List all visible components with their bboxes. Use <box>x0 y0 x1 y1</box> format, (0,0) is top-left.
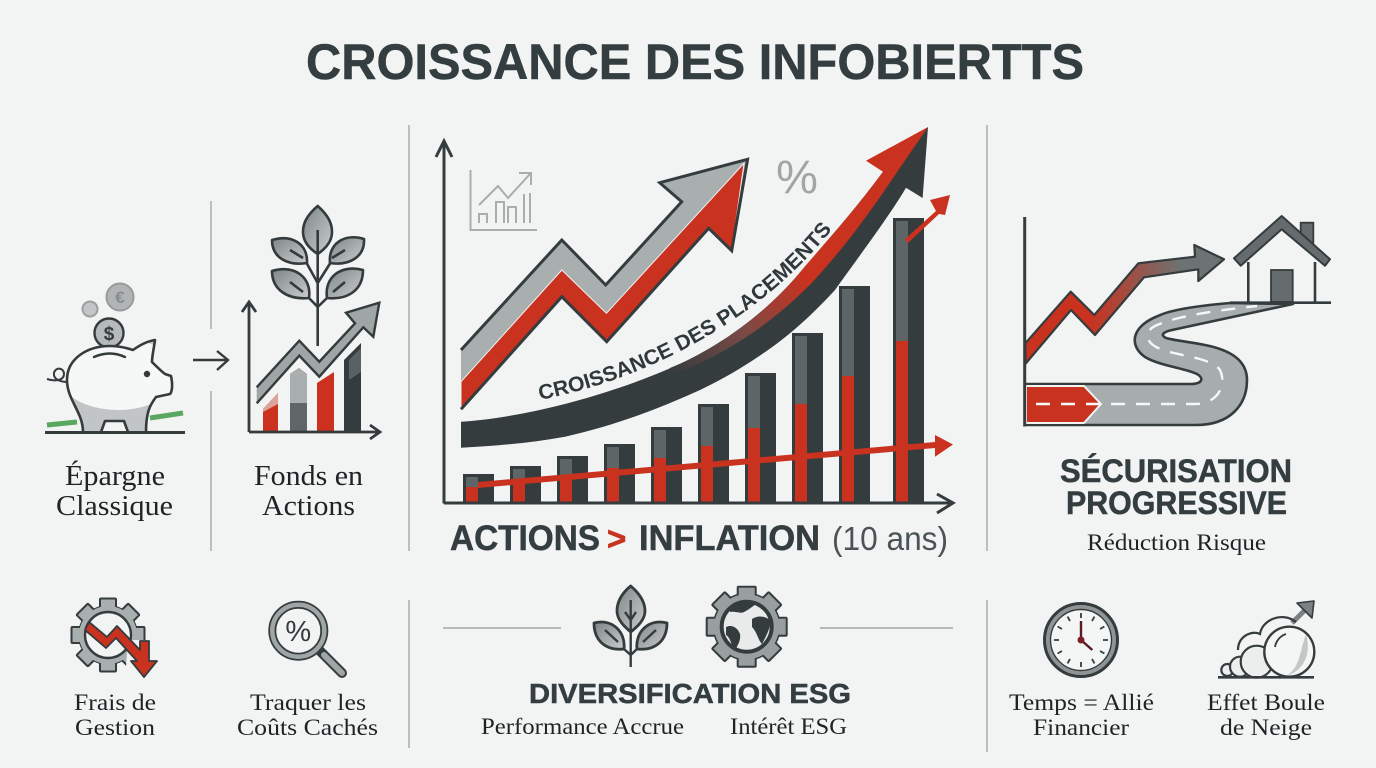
heading: sécurisation progressive: PROGRESSIVE <box>1066 485 1287 521</box>
percent symbol: % <box>776 150 818 203</box>
icon: magnifier <box>272 605 342 673</box>
heading: diversification esg: DIVERSIFICATION ESG <box>529 678 851 709</box>
axes <box>436 141 953 513</box>
icon: piggy bank <box>45 284 185 432</box>
caption duration: (10 ans) <box>832 520 948 557</box>
zigzag arrow <box>461 159 748 409</box>
inflation arrow <box>478 435 953 488</box>
label: effet boule de neige: de Neige <box>1220 715 1312 740</box>
heading: sécurisation progressive: SÉCURISATION <box>1060 453 1292 489</box>
label: effet boule de neige <box>1207 690 1325 740</box>
icon: clock <box>1045 604 1117 676</box>
label: fonds en actions: Actions <box>262 491 355 522</box>
label: traquer les coûts cachés: Traquer les <box>250 690 366 715</box>
label: intérêt esg: Intérêt ESG <box>730 714 847 739</box>
icon: magnifier: % <box>285 616 311 648</box>
label: performance accrue: Performance Accrue <box>481 714 684 739</box>
caption inflation: INFLATION <box>639 519 820 558</box>
icon: road to house <box>1025 216 1331 425</box>
arrow <box>193 351 228 370</box>
bar chart <box>463 218 924 503</box>
label: épargne classique: Épargne <box>65 461 165 492</box>
label: frais de gestion: Gestion <box>75 715 156 740</box>
label: épargne classique: Classique <box>56 491 173 522</box>
label: temps allié financier: Financier <box>1033 715 1129 740</box>
panel: épargne classique <box>45 284 185 522</box>
panel: sécurisation progressive <box>1025 216 1331 555</box>
label: fonds en actions <box>254 461 363 522</box>
icon: mini chart <box>470 170 537 230</box>
icon: gear with falling arrow <box>70 598 160 680</box>
panel: effet boule de neige <box>1207 601 1325 740</box>
label: épargne classique <box>56 461 173 522</box>
chart caption: ACTIONS <box>450 519 600 558</box>
label: réduction risque: Réduction Risque <box>1087 530 1266 555</box>
panel: temps allié <box>1009 604 1154 740</box>
panel: main chart <box>434 127 956 558</box>
caption arrow: > <box>607 520 626 557</box>
icon: globe gear <box>706 586 788 668</box>
label: temps allié financier: Temps = Allié <box>1009 690 1154 715</box>
curved growth arrow <box>461 127 928 448</box>
label: effet boule de neige: Effet Boule <box>1207 690 1325 715</box>
panel: traquer les coûts <box>237 605 378 740</box>
label: fonds en actions: Fonds en <box>254 461 363 492</box>
small red arrow <box>905 195 950 243</box>
label: traquer les coûts cachés: Coûts Cachés <box>237 715 378 740</box>
label: traquer les coûts cachés <box>237 690 378 740</box>
title: CROISSANCE DES INFOBIERTTS <box>306 34 1084 90</box>
panel: fonds en actions <box>242 206 380 522</box>
heading: sécurisation progressive <box>1060 453 1292 521</box>
icon: snowball <box>1218 601 1314 678</box>
label: frais de gestion <box>74 690 156 740</box>
label: frais de gestion: Frais de <box>74 690 156 715</box>
panel: frais de gestion <box>70 598 160 740</box>
icon: piggy bank: € <box>115 288 125 307</box>
icon: piggy bank: $ <box>104 324 115 345</box>
label: temps allié financier <box>1009 690 1154 740</box>
curved label: CROISSANCE DES PLACEMENTS <box>539 222 830 399</box>
panel: diversification esg <box>481 586 851 739</box>
icon: leaf <box>594 586 667 667</box>
icon: plant and chart <box>242 206 380 439</box>
